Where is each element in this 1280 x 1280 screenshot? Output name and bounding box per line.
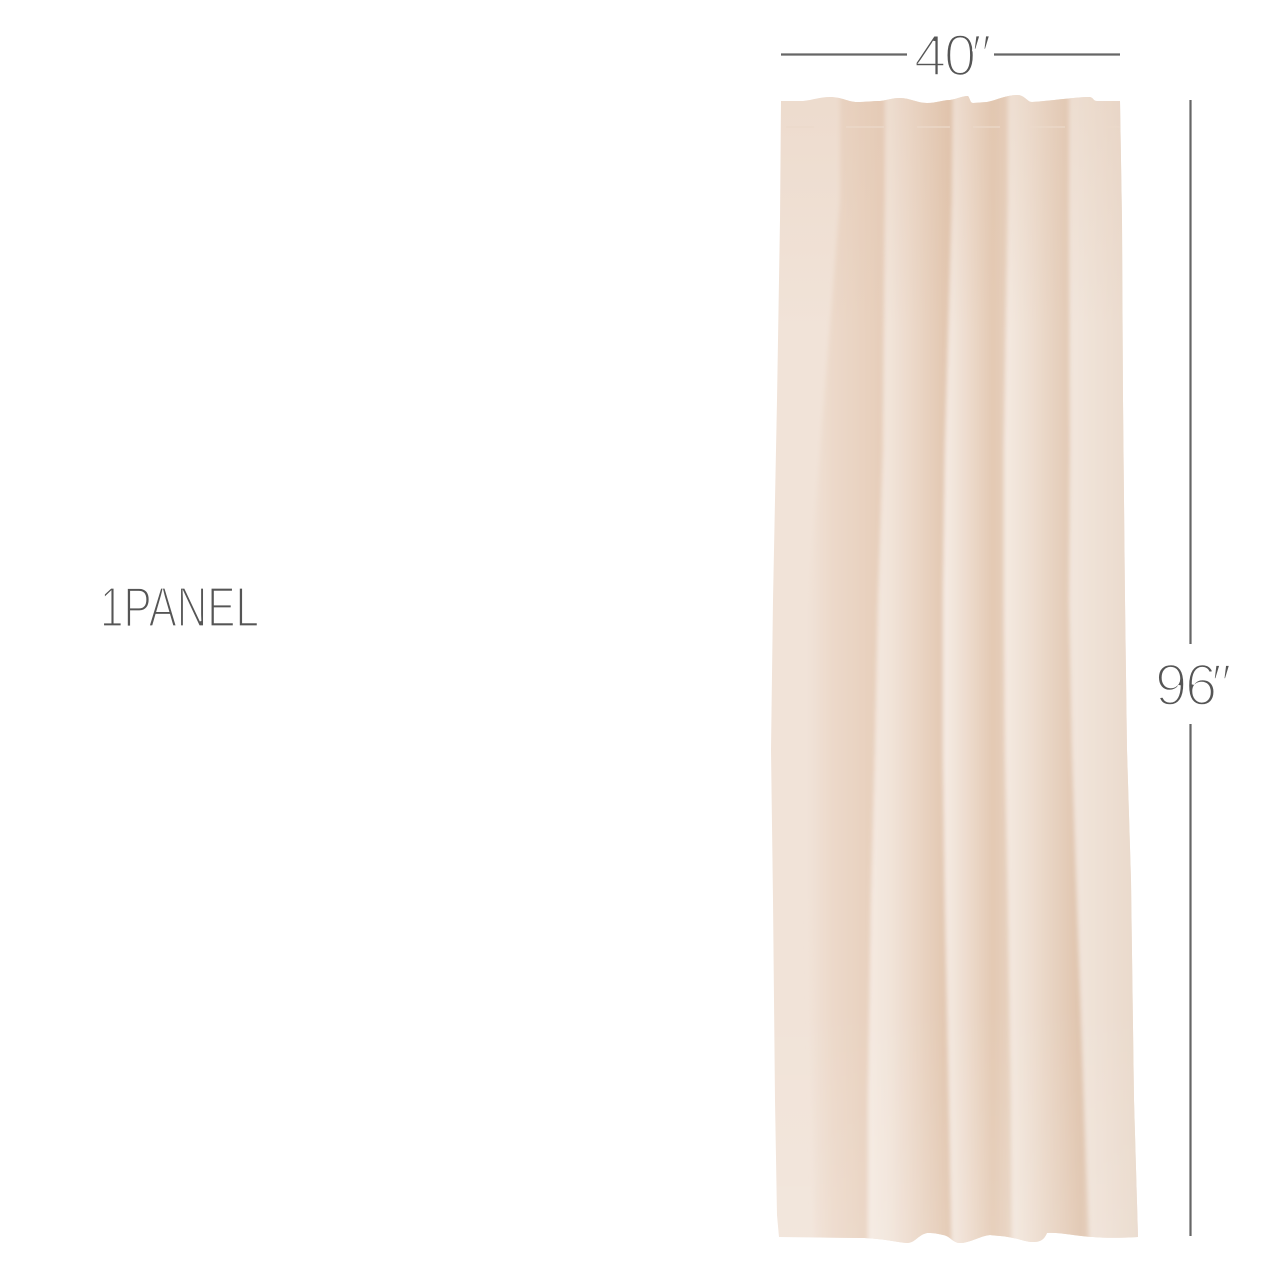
dimension: height 96 inches: 96″ [1155, 653, 1232, 718]
curtain panel [760, 80, 1150, 1260]
dimension: width 40 inches: 40″ [914, 24, 992, 88]
heading: 1 panel label: 1PANEL [100, 576, 259, 640]
